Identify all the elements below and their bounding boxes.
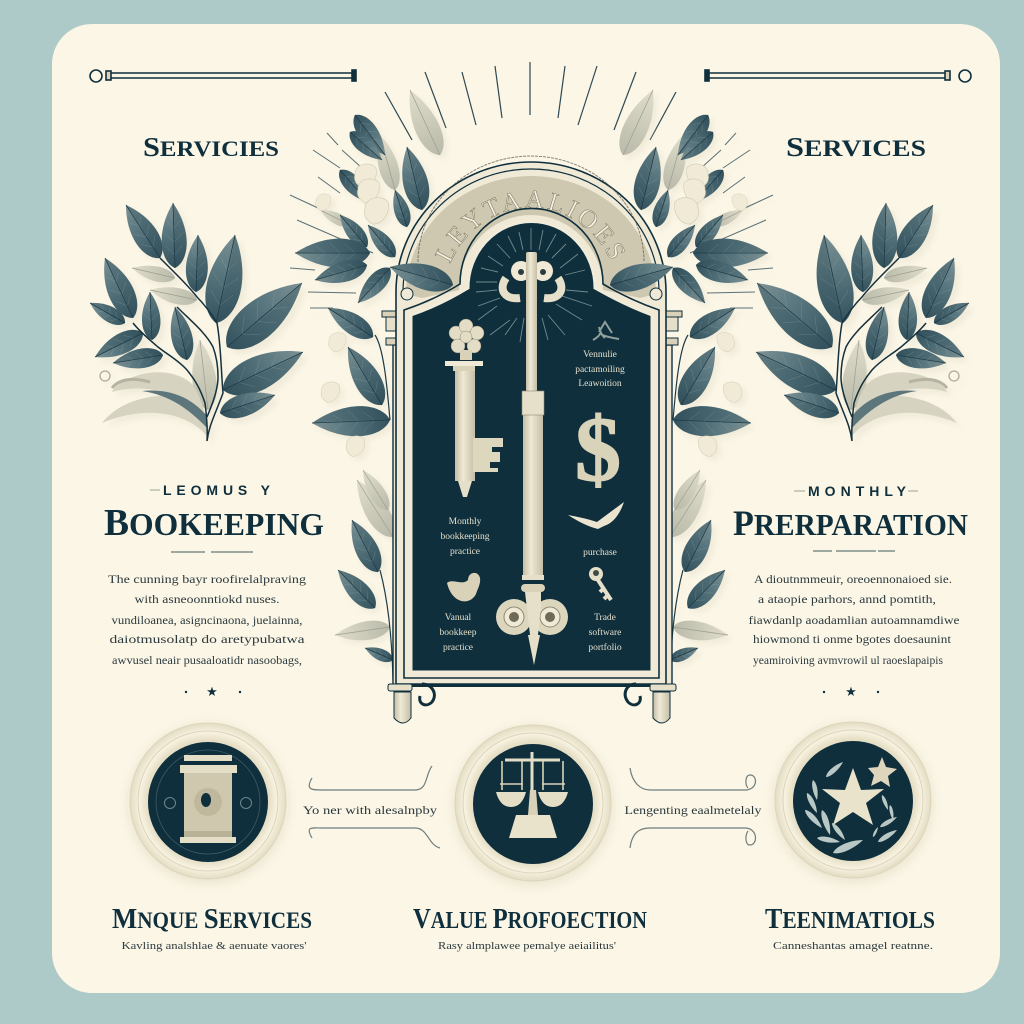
soft shadow: left foliage (294, 89, 455, 684)
right star divider: ★ (845, 684, 857, 699)
bird icon (568, 502, 624, 529)
left divider (171, 551, 253, 553)
soft shadow: right branch (750, 203, 978, 446)
bottom label 1: MNQUE SERVICES (112, 903, 312, 935)
small sprout (593, 322, 619, 340)
bottom label 1: Kavling analshlae & aenuate vaores' (122, 940, 307, 952)
panel text left middle: bookkeeping (440, 532, 490, 542)
connector 1 (309, 766, 440, 848)
bottom label 2: VALUE PROFOECTION (413, 903, 648, 935)
soft shadow: left branch (91, 203, 319, 446)
left star divider: ★ (206, 684, 218, 699)
panel text purchase: purchase (583, 548, 617, 558)
medallion 2: scales icon (453, 725, 613, 886)
right title: PRERPARATION (733, 503, 968, 543)
right body text: a ataopie parhors, annd pomtith, (758, 592, 936, 606)
panel text right top (575, 350, 625, 389)
arch frame (396, 162, 666, 684)
left title: BOOKEEPING (104, 502, 324, 544)
left body text: daiotmusolatp do aretypubatwa (110, 632, 305, 646)
panel text right bottom (588, 613, 622, 653)
right leaf branch (745, 198, 973, 441)
medallion 1: book icon (128, 723, 288, 884)
central arch panel with keys (382, 116, 722, 724)
panel text left bottom: bookkeep (440, 628, 477, 638)
right body text (748, 572, 960, 667)
connector 1 text: Yo ner with alesalnpby (303, 803, 437, 817)
panel text left middle (440, 517, 490, 557)
left post (382, 311, 411, 723)
center key (496, 252, 568, 665)
panel text right bottom: Trade (594, 613, 616, 623)
frame scroll feet (420, 684, 640, 705)
duck icon (447, 573, 480, 601)
right body text: hiowmond ti onme bgotes doesaunint (753, 632, 952, 646)
arch side leaves (387, 255, 456, 297)
left body text: with asneoonntiokd nuses. (134, 592, 280, 606)
bottom label 2 (413, 903, 648, 952)
sun rays behind arch (385, 62, 676, 140)
medallion 3: stars icon (773, 722, 933, 883)
connector 2 text: Lengenting eaalmetelaly (624, 803, 762, 817)
right body text: A dioutnmmeuir, oreoennonaioed sie. (754, 572, 952, 586)
dollar sign: $ (575, 398, 621, 500)
key rays (476, 228, 592, 342)
central foliage left (290, 85, 451, 680)
left kicker: LEOMUS Y (163, 482, 271, 498)
panel text right top: Leawoition (578, 379, 622, 389)
right kicker: MONTHLY (808, 483, 907, 499)
heading: services right: SERVICES (786, 132, 926, 162)
panel text left middle: practice (450, 547, 480, 557)
shoulder scrolls (401, 288, 662, 300)
right body text: yeamiroiving avmvrowil ul raoeslapaipis (753, 653, 943, 667)
bottom label 3 (765, 903, 935, 952)
left body text: awvusel neair pusaaloatidr nasoobags, (112, 653, 302, 667)
bottom label 3: TEENIMATIOLS (765, 903, 935, 935)
left key (445, 319, 503, 497)
panel text right top: pactamoiling (575, 365, 625, 375)
panel text left bottom: practice (443, 643, 473, 653)
panel text right bottom: software (589, 627, 621, 638)
panel text right bottom: portfolio (588, 642, 622, 653)
arch text: LEYTAALIOES (434, 190, 625, 264)
central foliage right (612, 85, 773, 680)
connector 2 (630, 768, 755, 848)
top right ornament (705, 70, 971, 82)
panel text right top: Vennulie (583, 350, 617, 360)
bottom label 1 (112, 903, 312, 952)
small key icon (589, 567, 611, 600)
bottom label 3: Canneshantas amagel reatnne. (773, 940, 933, 952)
panel text left bottom: Vanual (445, 613, 472, 623)
soft shadow: right foliage (616, 89, 777, 684)
panel text left bottom (440, 613, 477, 653)
heading: services left: SERVICIES (143, 132, 279, 162)
right post (653, 311, 682, 723)
dark panel (411, 221, 652, 672)
bottom label 2: Rasy almplawee pemalye aeiailitus' (438, 940, 616, 952)
left body text (108, 572, 306, 667)
right star divider (823, 684, 879, 699)
left star divider (185, 684, 241, 699)
right body text: fiawdanlp aoadamlian autoamnamdiwe (748, 613, 960, 627)
right divider (813, 550, 895, 552)
left body text: The cunning bayr roofirelalpraving (108, 572, 306, 586)
left leaf branch (86, 198, 314, 441)
left body text: vundiloanea, asigncinaona, juelainna, (112, 613, 302, 627)
top left ornament (90, 70, 356, 82)
panel text left middle: Monthly (449, 517, 482, 527)
